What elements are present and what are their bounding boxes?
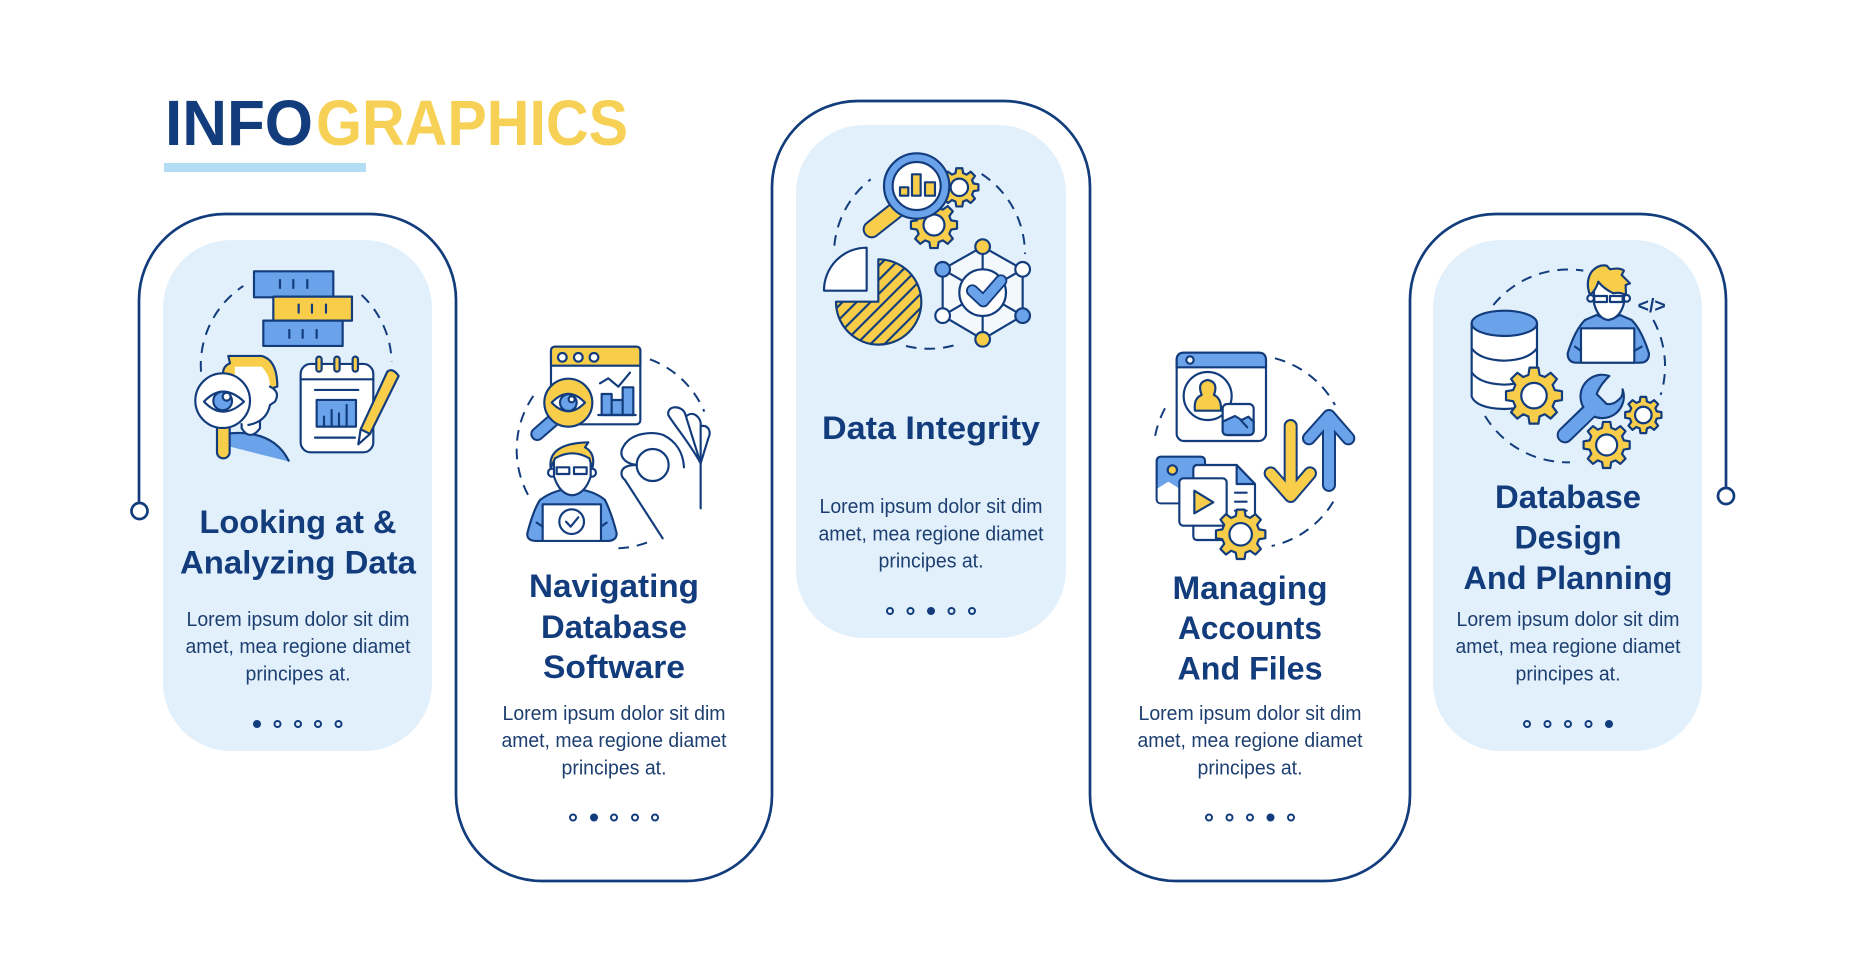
body text: principes at. [878,550,984,572]
panel: database design and planning [1433,240,1702,751]
pagination dots [887,608,975,614]
icon: database, developer, wrench and gears [1472,265,1666,468]
body text: principes at. [562,758,666,780]
icon: window, magnifier, user and ok hand [517,347,710,548]
panel: data integrity [796,125,1066,638]
body text: Lorem ipsum dolor sit dim [1456,609,1680,631]
body text [1456,609,1681,686]
body text: amet, mea regione diamet [186,636,411,658]
body text: Lorem ipsum dolor sit dim [502,703,726,725]
title [165,87,628,159]
icon: magnifier, gears, pie chart and network [822,152,1032,350]
heading: And Files [1178,650,1322,686]
body text: principes at. [1198,758,1302,780]
heading: Design [1514,520,1622,556]
icon detail: code brackets: </> [1638,296,1666,317]
title underline [164,163,366,172]
heading: And Planning [1464,560,1672,596]
panel: navigating database software [502,347,727,820]
pagination dots [254,721,342,727]
pagination dots [570,814,658,820]
body text [186,609,411,686]
body text [818,496,1044,572]
body text: Lorem ipsum dolor sit dim [820,496,1042,518]
body text: principes at. [246,664,350,686]
body text: Lorem ipsum dolor sit dim [1138,703,1362,725]
heading: Database [1495,479,1641,515]
icon: books, person with magnifier, notepad [195,271,399,462]
pagination dots [1206,814,1294,820]
heading [1464,479,1672,596]
heading: Accounts [1178,610,1322,646]
heading [180,504,417,580]
body text: principes at. [1516,664,1620,686]
heading: Database [541,609,687,645]
heading: Managing [1172,570,1328,606]
body text: Lorem ipsum dolor sit dim [186,609,410,631]
body text: amet, mea regione diamet [502,730,727,752]
body text [502,703,727,780]
pagination dots [1524,721,1612,727]
icon: account window, transfer arrows and files with gear [1154,353,1348,559]
panel: looking at and analyzing data [163,240,432,751]
heading: Data Integrity [822,410,1040,446]
heading: Looking at & [200,504,396,540]
panel: managing accounts and files [1138,353,1363,820]
connecting outline with end circles [132,101,1734,881]
title: INFO [165,87,313,159]
heading: Navigating [529,568,699,604]
title: GRAPHICS [316,87,628,159]
body text: amet, mea regione diamet [818,524,1044,546]
heading [1172,570,1328,686]
heading: Software [543,649,685,685]
body text: amet, mea regione diamet [1138,730,1363,752]
body text [1138,703,1363,780]
heading: Analyzing Data [180,544,417,580]
heading [529,568,699,685]
body text: amet, mea regione diamet [1456,636,1681,658]
